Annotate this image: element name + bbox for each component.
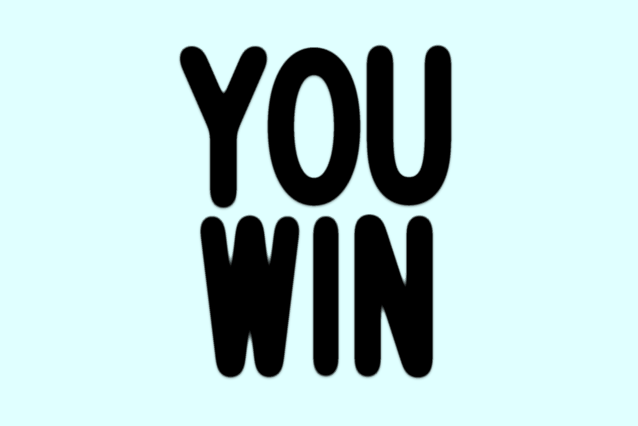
- heading line: YOU: Y: [184, 15, 263, 248]
- heading line: YOU: O: [268, 24, 360, 238]
- heading line: WIN: W: [203, 185, 299, 417]
- heading line: YOU: U: [363, 16, 455, 239]
- heading line: WIN: I: [311, 184, 341, 417]
- heading line: WIN: N: [350, 184, 441, 417]
- heading line: WIN: [203, 184, 441, 417]
- heading line: YOU: [184, 15, 455, 248]
- title: YOU WIN: [184, 15, 455, 417]
